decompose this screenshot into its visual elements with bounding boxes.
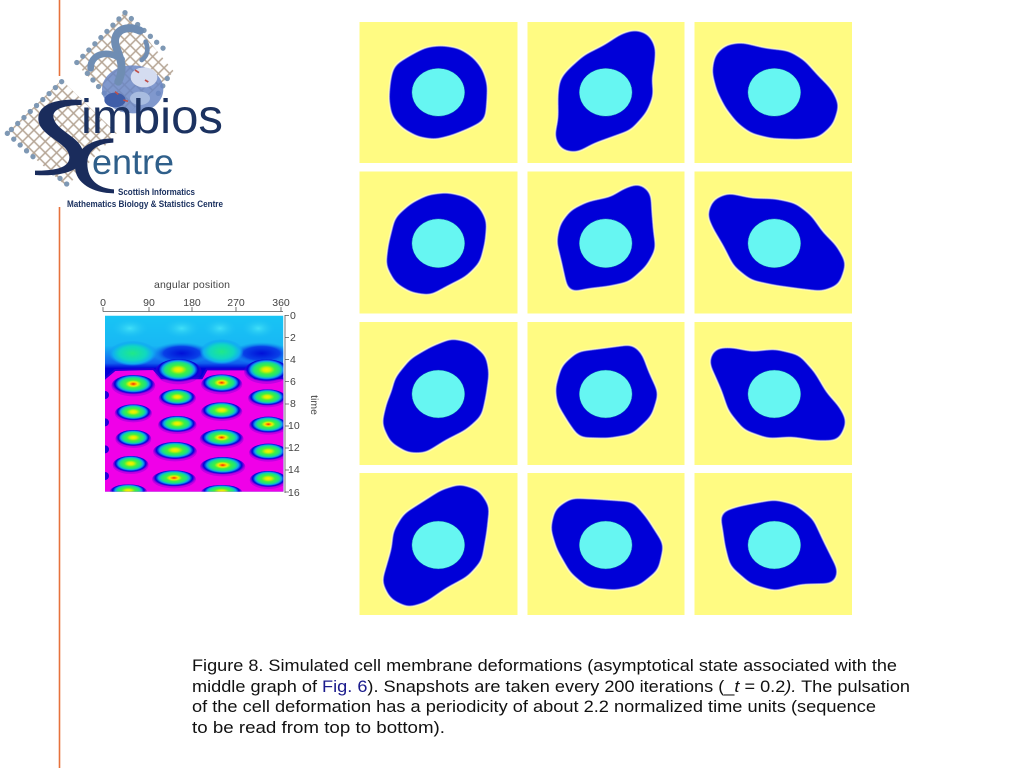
icon: blue cell sphere	[102, 65, 163, 113]
figure caption	[192, 656, 910, 737]
panel: row 1 col 2	[528, 22, 684, 163]
logo tagline line 1: Scottish Informatics	[118, 187, 195, 197]
top axis: 180	[183, 297, 201, 309]
icon: lower lattice diamond	[7, 80, 117, 187]
heatmap field	[105, 316, 284, 492]
right axis: 4	[290, 354, 296, 366]
panel: row 4 col 2	[528, 473, 684, 615]
top axis: 90	[143, 297, 155, 309]
panel: row 3 col 3	[694, 322, 852, 465]
right axis: 12	[288, 442, 300, 454]
right axis: 16	[288, 487, 300, 499]
caption line 2: middle graph of Fig. 6). Snapshots are taken every 200 iterations (_ t = 0.2). The pulsation	[192, 677, 910, 696]
caption line 3: of the cell deformation has a periodicity of about 2.2 normalized time units (sequence	[192, 697, 876, 716]
top axis: 270	[227, 297, 245, 309]
chart title: angular position: angular position	[154, 279, 230, 291]
panel: row 3 col 2	[528, 322, 684, 465]
panel: row 4 col 3	[694, 473, 852, 615]
logo: Simbios Centre	[7, 12, 223, 209]
top axis	[100, 297, 290, 312]
axis label: time: time	[308, 395, 320, 415]
panel: row 1 col 3	[694, 22, 852, 163]
icon: light blue S ribbon	[91, 28, 147, 82]
logo word: imbios: imbios	[81, 91, 223, 144]
orange margin line	[58, 0, 60, 768]
top axis: 0	[100, 297, 106, 309]
caption line 4: to be read from top to bottom).	[192, 718, 445, 737]
panel: row 1 col 1	[360, 22, 518, 163]
panel: row 3 col 1	[360, 322, 518, 465]
right axis: 10	[288, 420, 300, 432]
caption line 1: Figure 8. Simulated cell membrane deformations (asymptotical state associated with the	[192, 656, 897, 675]
right axis	[285, 310, 300, 499]
right axis: 2	[290, 332, 296, 344]
panel: row 2 col 2	[528, 172, 684, 314]
logo tagline line 2: Mathematics Biology & Statistics Centre	[67, 199, 223, 209]
top axis: 360	[272, 297, 290, 309]
panel: row 2 col 1	[360, 172, 518, 314]
heatmap chart	[100, 279, 320, 500]
panel: row 4 col 1	[360, 473, 518, 615]
right axis: 14	[288, 464, 300, 476]
icon: upper lattice diamond	[76, 12, 174, 117]
right axis: 6	[290, 376, 296, 388]
cell deformation snapshots grid	[360, 22, 852, 615]
icon: navy S letter	[35, 100, 83, 175]
panel: row 2 col 3	[694, 172, 852, 314]
logo word: entre: entre	[92, 143, 174, 182]
icon: navy C letter	[75, 138, 114, 193]
right axis: 0	[290, 310, 296, 322]
right axis: 8	[290, 398, 296, 410]
